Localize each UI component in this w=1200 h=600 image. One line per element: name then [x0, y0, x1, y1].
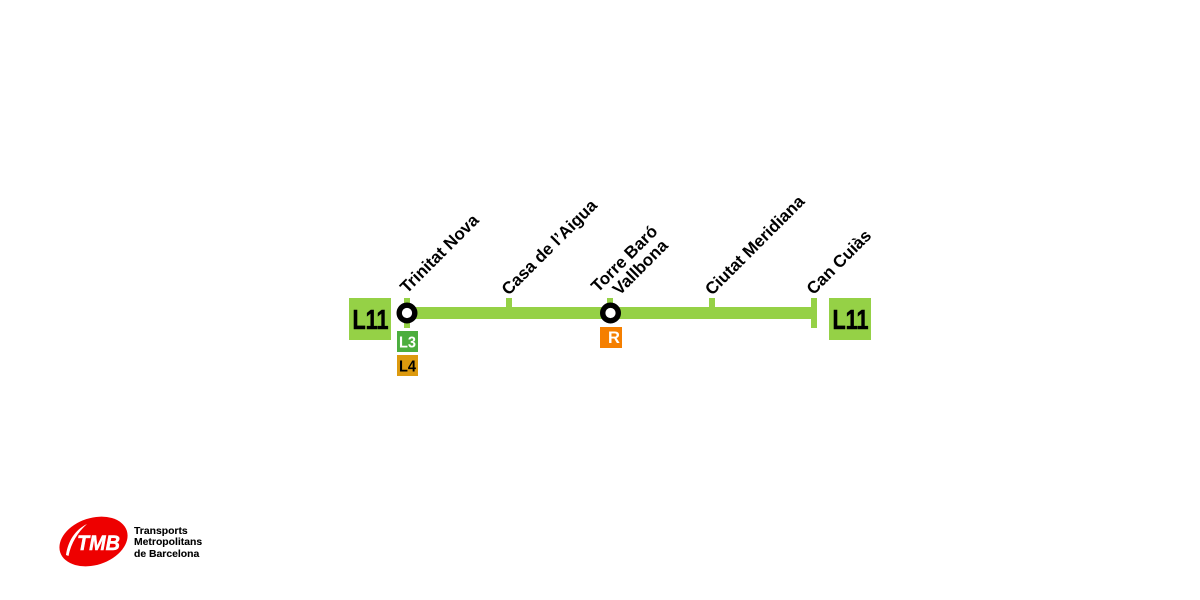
- badge: L11 left: L11: [352, 304, 388, 335]
- route line L11: [404, 298, 817, 328]
- station marker: Torre Baró Vallbona interchange: [603, 305, 618, 321]
- label: Trinitat Nova: Trinitat Nova: [396, 210, 483, 297]
- TMB wordmark: TMB: [77, 532, 120, 555]
- label: Torre Baró Vallbona: Vallbona: [609, 236, 672, 299]
- label: Casa de l'Aigua: Casa de l’Aigua: [498, 195, 601, 299]
- label: Ciutat Meridiana: Ciutat Meridiana: [701, 192, 809, 299]
- label: Can Cuiàs: Can Cuiàs: [803, 226, 875, 298]
- logo text: de Barcelona: [134, 549, 199, 560]
- badge: L3 connection: L3: [399, 334, 416, 352]
- logo: TMB: [53, 508, 202, 575]
- badge: L4 connection: L4: [399, 358, 416, 376]
- station marker: Trinitat Nova interchange: [399, 305, 415, 321]
- logo text: [134, 526, 202, 560]
- badge: Rodalies R connection: [600, 327, 622, 348]
- badge: Rodalies R connection: R: [608, 329, 620, 347]
- logo text: Metropolitans: [134, 537, 202, 548]
- logo text: Transports: [134, 526, 188, 537]
- badge: L11 right: L11: [832, 304, 868, 335]
- icon: TMB red ellipse: [53, 508, 134, 575]
- label: Torre Baró Vallbona: Torre Baró: [587, 222, 661, 296]
- badge: L11 left: [349, 298, 391, 340]
- badge: L11 right: [829, 298, 871, 340]
